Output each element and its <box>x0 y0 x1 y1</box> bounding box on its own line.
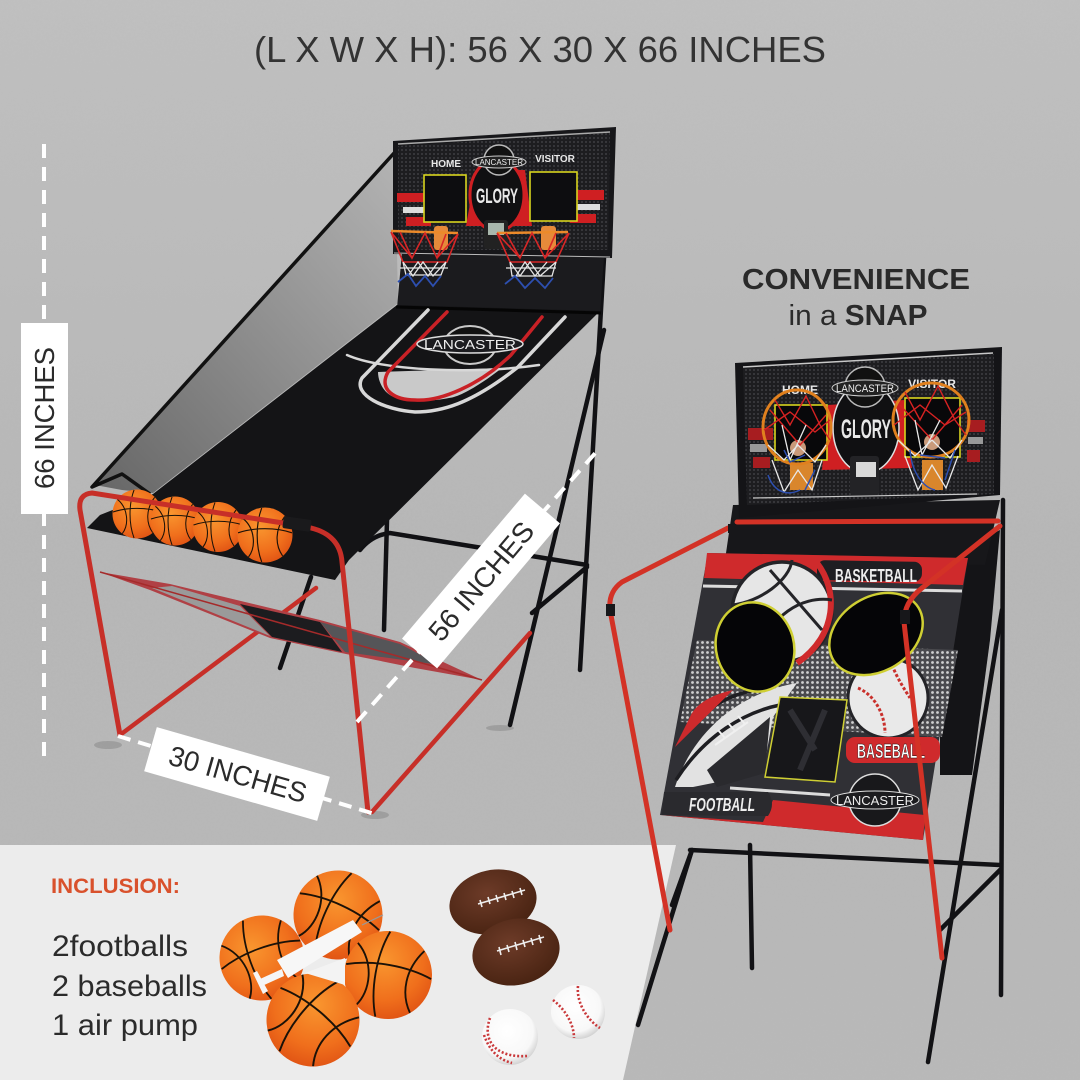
panel: inclusion background <box>0 845 676 1080</box>
curtain <box>725 500 1000 565</box>
left hoop <box>763 390 831 493</box>
list items: 2footballs <box>52 930 188 963</box>
dimension: 66 inches <box>21 144 68 762</box>
backboard <box>393 127 616 258</box>
list items: 1 air pump <box>52 1009 198 1042</box>
heading: convenience in a snap: in a SNAP <box>788 300 928 332</box>
ramp logo <box>417 326 523 364</box>
basketballs <box>208 856 439 1080</box>
rear net <box>940 530 1000 775</box>
board text <box>431 154 576 208</box>
basketball hole <box>706 593 804 701</box>
dimension: 56 inches <box>357 450 598 722</box>
red rear bars <box>120 588 530 812</box>
basketball label: BASKETBALL <box>835 566 917 586</box>
banner logo <box>831 774 919 826</box>
football label <box>662 792 772 816</box>
side net <box>92 152 398 494</box>
floor shadows <box>94 725 514 819</box>
footballs <box>443 862 566 993</box>
board text: VISITOR <box>535 154 576 165</box>
dimension: 30 inches <box>118 727 378 821</box>
dimension: 56 inches: 56 INCHES <box>422 516 540 647</box>
frame clip <box>282 516 312 532</box>
board logo: LANCASTER <box>836 383 894 395</box>
heading: convenience in a snap <box>742 264 970 332</box>
black legs <box>638 500 1003 1062</box>
heading: convenience in a snap: CONVENIENCE <box>742 264 970 296</box>
banner logo: LANCASTER <box>836 793 914 808</box>
baseball label: BASEBALL <box>857 741 925 763</box>
board text: HOME <box>782 383 818 397</box>
ramp logo: LANCASTER <box>424 337 516 352</box>
board text: HOME <box>431 159 461 170</box>
target banner <box>660 553 968 840</box>
list items: 2 baseballs <box>52 970 207 1003</box>
scoreboard visitor <box>530 172 577 221</box>
LCD <box>850 456 879 495</box>
board logo <box>832 367 898 407</box>
football graphic <box>675 683 797 787</box>
right game machine <box>606 347 1003 1062</box>
balls on ramp <box>112 490 292 562</box>
backboard <box>735 347 1002 518</box>
football hole <box>814 576 938 692</box>
rear curtain <box>397 252 604 312</box>
dimension: 30 inches: 30 INCHES <box>165 740 310 809</box>
red frame <box>80 493 368 812</box>
baseballs <box>482 985 605 1065</box>
court markings <box>347 310 565 412</box>
board text <box>782 377 956 444</box>
scoreboards <box>775 398 960 460</box>
baseball label <box>846 737 940 763</box>
lower ball return net <box>100 572 482 680</box>
baseball pocket <box>765 697 847 782</box>
inclusion heading: INCLUSION: <box>51 875 180 898</box>
right hoop <box>893 383 969 490</box>
left game machine <box>80 127 616 819</box>
baseball graphic <box>848 658 928 738</box>
black rear legs <box>280 258 604 725</box>
left hoop <box>391 226 458 286</box>
board logo <box>472 145 526 175</box>
air pump <box>253 915 383 994</box>
board text: VISITOR <box>908 377 956 391</box>
dimension: 66 inches: 66 INCHES <box>29 347 60 489</box>
board text: GLORY <box>841 414 891 444</box>
board logo: LANCASTER <box>475 158 523 167</box>
black ramp <box>87 305 601 580</box>
LCD <box>484 220 508 249</box>
red stripes <box>397 170 604 226</box>
red frame <box>610 521 1000 958</box>
title: (L X W X H): 56 X 30 X 66 INCHES <box>254 29 826 70</box>
frame clips <box>606 524 910 624</box>
inclusion list <box>51 875 207 1042</box>
list items <box>52 930 207 1042</box>
basketball graphic <box>732 560 832 663</box>
board text: GLORY <box>476 185 518 208</box>
scoreboard home <box>424 175 466 222</box>
football label: FOOTBALL <box>689 795 755 815</box>
red bottom stripe <box>660 800 925 840</box>
right hoop <box>497 226 569 288</box>
